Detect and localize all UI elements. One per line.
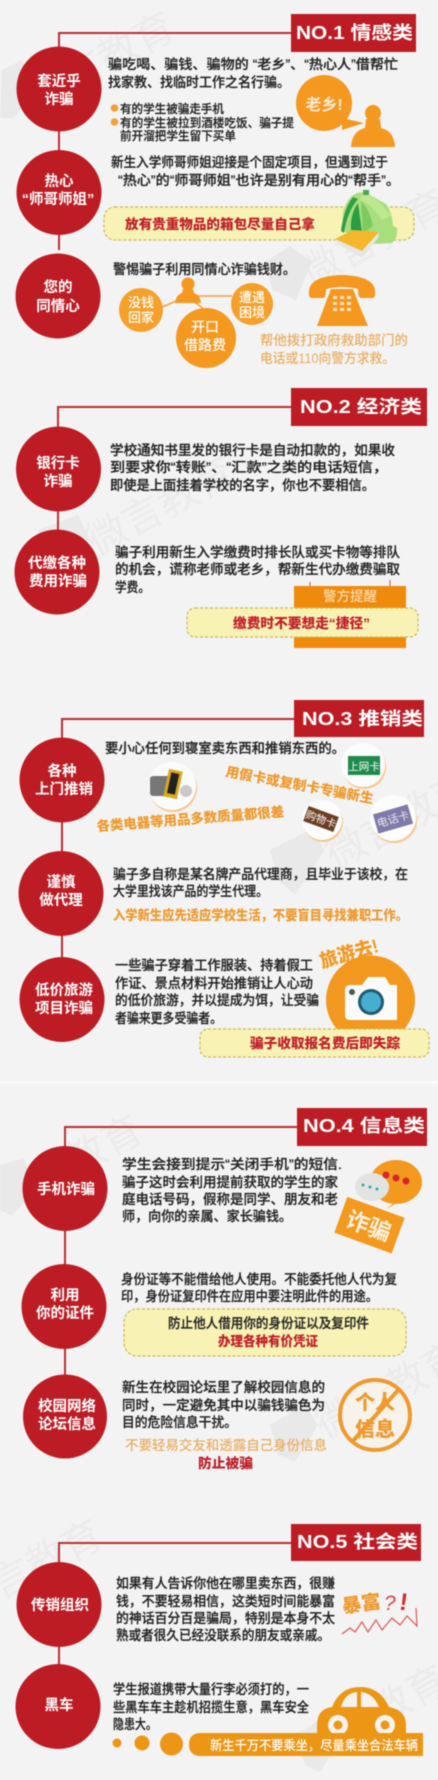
badge: 利用你的证件: 你的证件 — [36, 1304, 94, 1322]
callout: 有价凭证: 办理各种有价凭证 — [218, 1333, 318, 1349]
text block: 黑车: 隐患大。 — [113, 1717, 157, 1732]
badge: 热心师哥师姐: 热心 — [44, 173, 74, 190]
text block: 师哥师姐 — [111, 154, 400, 188]
text block: 旅游: 的低价旅游，并以提成为饵，让受骗 — [115, 992, 319, 1008]
icon: car — [317, 1687, 406, 1735]
text block: 黑车: 些黑车车主趁机招揽生意，黑车安全 — [113, 1699, 309, 1715]
badge: 套近乎诈骗: 套近乎 — [37, 73, 81, 90]
badge: 低价旅游项目诈骗: 低价旅游 — [35, 981, 93, 999]
badge: 校园网络论坛信息: 校园网络 — [38, 1397, 96, 1415]
icon: 上网卡: 上网卡 — [348, 760, 380, 773]
icon: 电话卡: 电话卡 — [375, 809, 411, 830]
panel: NO.3 sales scams — [18, 700, 429, 1057]
text: 微言教育 — [80, 450, 241, 564]
badge: 利用你的证件 — [22, 1264, 106, 1349]
callout: 箱包: 放有贵重物品的箱包尽量自己拿 — [125, 216, 316, 232]
badge: 低价旅游项目诈骗 — [20, 957, 104, 1042]
text block: 传销: 熟或者很久已经没联系的朋友或亲戚。 — [116, 1627, 330, 1643]
text block: 求救: 电话或110向警方求救。 — [260, 350, 395, 366]
text block: 手机: 师，向你的亲属、家长骗钱。 — [122, 1208, 292, 1224]
icon: no personal info: 信息 — [355, 1417, 395, 1441]
text block: 论坛 — [122, 1379, 325, 1430]
stamp: 诈骗: 诈骗 — [343, 1206, 395, 1246]
badge: 谨慎做代理: 做代理 — [39, 892, 83, 909]
bullet list: 有的学生被骗走手机 — [120, 101, 224, 116]
diagram: 开口借路费: 借路费 — [184, 337, 226, 353]
text block: 老乡: 骗吃喝、骗钱、骗物的 “老乡”、“热心人”借帮忙 — [108, 56, 399, 72]
label: 暴富: ? — [384, 1592, 396, 1615]
text block: 论坛: 同时，一定避免其中以骗钱骗色为 — [122, 1397, 325, 1413]
text block: 寝室: 要小心任何到寝室卖东西和推销东西的。 — [105, 740, 345, 756]
heading: NO.3: NO.3 推销类 — [302, 709, 423, 729]
text block: 论坛: 目的危险信息干扰。 — [122, 1414, 237, 1430]
badge: 各种上门推销 — [20, 738, 104, 822]
bullet list — [111, 101, 294, 143]
badge: 各种上门推销: 各种 — [48, 762, 76, 780]
badge: 黑车 — [16, 1664, 100, 1749]
icon: no personal info — [340, 1380, 410, 1450]
text block: 证件: 身份证等不能借给他人使用。不能委托他人代为复 — [121, 1271, 397, 1287]
text block: 银行卡 — [110, 442, 396, 493]
text block: 代缴: 的机会，谎称老师或老乡，帮新生代办缴费骗取 — [115, 561, 401, 577]
label: 暴富 — [340, 1589, 409, 1618]
text block: 手机 — [122, 1156, 342, 1224]
text block: 手机: 骗子这时会利用提前获取的学生的家 — [122, 1174, 338, 1190]
text block: 论坛: 新生在校园论坛里了解校园信息的 — [122, 1379, 325, 1395]
badge: 谨慎做代理 — [18, 851, 104, 936]
dots — [112, 1732, 183, 1756]
text block: 代理: 大学里找该产品的学生代理。 — [113, 883, 268, 899]
notice board: 警方提醒 — [294, 580, 406, 648]
text block: 代理 — [113, 866, 408, 923]
callout: 失踪: 骗子收取报名费后即失踪 — [250, 1035, 401, 1051]
panel: NO.2 economic scams — [14, 388, 427, 648]
heading: NO.4: NO.4 信息类 — [303, 1115, 425, 1136]
text block: 旅游: 者骗来更多受骗者。 — [115, 1010, 222, 1026]
callout: 有价凭证: 防止他人借用你的身份证以及复印件 — [168, 1315, 369, 1331]
heading: NO.5: NO.5 社会类 — [297, 1531, 418, 1552]
connector line 4 — [65, 1127, 298, 1400]
panel: NO.5 social scams — [16, 1524, 423, 1756]
heading: NO.3 — [294, 700, 424, 737]
icon: 购物卡: 购物卡 — [304, 808, 338, 831]
badge: 黑车: 黑车 — [44, 1696, 74, 1714]
icon: 购物卡 — [302, 800, 343, 842]
text block: 黑车: 学生报道携带大量行李必须打的，一 — [113, 1681, 309, 1697]
icon: appliances — [148, 762, 197, 812]
icon: telephone — [309, 275, 375, 326]
bullet list: 前开溜把学生留下买单 — [120, 128, 236, 143]
badge: 代缴各种费用诈骗 — [14, 530, 100, 614]
panel: NO.4 information scams — [22, 1108, 427, 1471]
badge: 手机诈骗 — [22, 1146, 108, 1231]
callout: 捷径 — [187, 608, 418, 637]
connector line 1 — [59, 33, 292, 250]
text block: 防止被骗: 不要轻易交友和透露自己身份信息 — [125, 1437, 327, 1453]
label: 旅游去: 旅游去! — [317, 934, 381, 973]
notice board: 警方提醒: 警方提醒 — [323, 588, 377, 604]
diagram: 开口借路费: 回家 — [128, 310, 154, 325]
callout: 捷径: 缴费时不要想走“捷径” — [233, 615, 370, 631]
badge: 银行卡诈骗: 银行卡 — [36, 454, 80, 472]
text block: 旅游: 作证、景点材料开始推销让人心动 — [115, 975, 313, 991]
text block: 证件 — [121, 1271, 397, 1304]
badge: 校园网络论坛信息: 论坛信息 — [38, 1415, 96, 1433]
icon: 电话卡 — [370, 795, 417, 843]
text block: 证件: 印，身份证复印件在应用中要注明此件的用途。 — [121, 1288, 378, 1304]
badge: 套近乎诈骗: 诈骗 — [44, 90, 74, 108]
text block: 代缴 — [115, 544, 401, 595]
label: 暴富: 暴富 — [340, 1590, 382, 1618]
text block: 代理: 骗子多自称是某名牌产品代理商，且毕业于该校，在 — [113, 866, 408, 882]
heading: NO.2 — [291, 388, 427, 426]
text block: 传销: 的神话百分百是骗局，特别是本身不太 — [116, 1610, 335, 1626]
callout: 失踪 — [200, 1029, 429, 1057]
badge: 手机诈骗: 手机诈骗 — [37, 1180, 95, 1198]
badge: 银行卡诈骗: 诈骗 — [44, 472, 72, 490]
badge: 套近乎诈骗 — [16, 46, 102, 132]
icon: no personal info: 个人 — [355, 1391, 395, 1414]
heading: NO.5 — [291, 1524, 421, 1561]
text: 言教育 — [56, 5, 182, 100]
badge: 代缴各种费用诈骗: 代缴各种 — [28, 554, 86, 572]
text block: 黑车 — [113, 1681, 309, 1732]
diagram: 开口借路费: 遭遇 — [239, 290, 265, 305]
connector line 3 — [62, 719, 295, 1000]
connector line 5 — [59, 1543, 292, 1680]
text block: 防止被骗 — [125, 1437, 327, 1471]
badge: 利用你的证件: 利用 — [50, 1287, 80, 1304]
text block: 防止被骗: 防止被骗 — [198, 1455, 253, 1471]
callout: 有价凭证 — [124, 1309, 406, 1356]
text block: 手机: 庭电话号码，假称是同学、朋友和老 — [122, 1191, 338, 1207]
zigzag line — [342, 1608, 417, 1634]
text block: 求救: 帮他拨打政府救助部门的 — [260, 332, 408, 348]
text block: 银行卡: 即使是上面挂着学校的名字，你也不要相信。 — [110, 477, 375, 493]
text block: 传销: 钱，不要轻易相信，这类短时间能暴富 — [116, 1593, 335, 1609]
heading: NO.4 — [297, 1108, 427, 1146]
heading: NO.2: NO.2 经济类 — [300, 397, 422, 417]
badge: 您的同情心: 同情心 — [36, 297, 80, 315]
icon: 上网卡 — [341, 743, 386, 789]
badge: 传销组织 — [16, 1562, 102, 1647]
text block: 代理: 入学新生应先适应学校生活，不要盲目寻找兼职工作。 — [113, 907, 408, 923]
text block: 求救 — [260, 332, 408, 366]
icon: speech bubble with person: 老乡! — [305, 95, 343, 114]
badge: 您的同情心 — [16, 254, 100, 338]
heading: NO.1 — [291, 14, 416, 52]
badge: 各种上门推销: 上门推销 — [35, 780, 93, 798]
icon: speech bubbles — [355, 1160, 422, 1209]
badge: 热心师哥师姐: “师哥师姐” — [22, 191, 94, 208]
badge: 银行卡诈骗 — [16, 426, 101, 512]
text block: 旅游 — [115, 958, 319, 1026]
text block: 同情心: 警惕骗子利用同情心诈骗钱财。 — [113, 261, 296, 277]
text block: 银行卡: 学校通知书里发的银行卡是自动扣款的，如果收 — [110, 442, 396, 458]
heading: NO.1: NO.1 情感类 — [296, 23, 413, 43]
banner: 合法车辆 — [189, 1733, 423, 1756]
stamp: 诈骗 — [334, 1197, 405, 1253]
text block: 师哥师姐: 新生入学师哥师姐迎接是个固定项目，但遇到过于 — [111, 154, 388, 170]
text: 言教育 — [24, 1108, 150, 1203]
diagram: 开口借路费: 困境 — [239, 305, 265, 320]
badge: 校园网络论坛信息 — [23, 1374, 107, 1458]
text block: 老乡 — [108, 56, 399, 90]
icon: speech bubble with person — [296, 75, 395, 147]
badge: 传销组织: 传销组织 — [31, 1596, 89, 1614]
text block: 师哥师姐: “热心”的“师哥师姐”也许是别有用心的“帮手”。 — [118, 172, 400, 188]
text block: 传销: 如果有人告诉你他在哪里卖东西，很赚 — [116, 1575, 335, 1591]
badge: 代缴各种费用诈骗: 费用诈骗 — [29, 572, 87, 590]
badge: 您的同情心: 您的 — [44, 278, 72, 296]
badge: 谨慎做代理: 谨慎 — [46, 873, 76, 891]
slanted text: 电器: 各类电器等用品多数质量都很差 — [96, 803, 285, 834]
text block: 传销 — [116, 1575, 335, 1643]
icon: camera — [326, 956, 415, 1044]
text block: 老乡: 找家教、找临时工作之名行骗。 — [108, 74, 290, 90]
bullet list: 有的学生被拉到酒楼吃饭、骗子提 — [120, 115, 294, 130]
slanted text: 假卡: 用假卡或复制卡专骗新生 — [224, 763, 375, 806]
text block: 代缴: 骗子利用新生入学缴费时排长队或买卡物等排队 — [115, 544, 401, 560]
diagram: 开口借路费 — [119, 278, 273, 368]
text block: 手机: 学生会接到提示“关闭手机”的短信. — [122, 1156, 342, 1172]
diagram: 开口借路费: 开口 — [191, 319, 219, 335]
badge: 热心师哥师姐 — [16, 150, 102, 235]
diagram: 开口借路费: 没钱 — [128, 295, 154, 310]
text block: 银行卡: 到要求你“转账”、“汇款”之类的电话短信， — [110, 459, 388, 475]
panel: NO.1 emotional scams — [16, 14, 416, 368]
icon: backpack and book — [335, 190, 397, 258]
label: 暴富: ! — [398, 1589, 409, 1616]
banner: 合法车辆: 新生千万不要乘坐，尽量乘坐合法车辆 — [210, 1738, 418, 1753]
badge: 低价旅游项目诈骗: 项目诈骗 — [35, 999, 93, 1017]
text block: 旅游: 一些骗子穿着工作服装、持着假工 — [115, 958, 313, 973]
callout: 箱包 — [104, 207, 414, 240]
connector line 2 — [58, 407, 292, 540]
text block: 代缴: 学费。 — [115, 579, 150, 595]
